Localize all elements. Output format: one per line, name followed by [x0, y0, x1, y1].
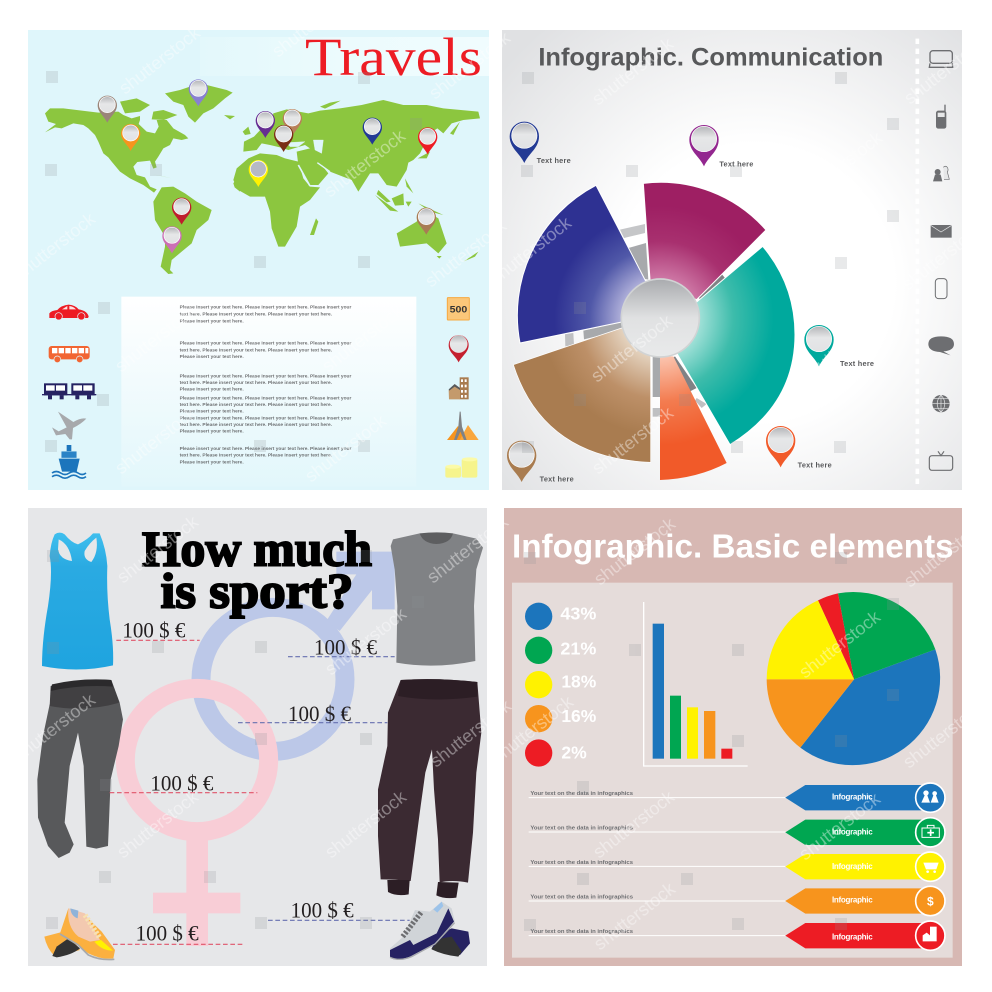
garment: tank top [42, 533, 113, 670]
arrow row green [785, 818, 945, 847]
icon: bus [49, 346, 90, 363]
paragraph text: Please insert your text here. Please insert your text here. Please insert your [180, 395, 351, 401]
garment: sleeveless shirt [391, 532, 483, 666]
watermark text: shutterstock [321, 786, 411, 862]
watermark text: shutterstock [113, 786, 203, 862]
arrow row orange: $ [927, 894, 934, 908]
arrow row blue: Infographic [832, 792, 873, 801]
icon: car [49, 305, 89, 320]
icon: globe [932, 395, 950, 412]
paragraph text: Please insert your text here. [180, 459, 244, 465]
row captions: Your text on the data in infographics [530, 895, 633, 901]
callout labels: Text here [540, 475, 574, 484]
callout labels: Text here [537, 156, 571, 165]
pin brown [417, 208, 436, 235]
icon: phone [936, 105, 946, 129]
icon: coins [445, 457, 477, 478]
arrow row red [785, 921, 945, 950]
paragraph text: text here. Please insert your text here. Please insert your text here. [180, 380, 333, 386]
paragraph text: Please insert your text here. Please insert your text here. Please insert your [180, 305, 351, 311]
center disc [621, 279, 699, 357]
arrow row blue [785, 783, 945, 812]
watermark text: shutterstock [320, 125, 410, 201]
paragraph text: Please insert your text here. Please insert your text here. Please insert your [180, 340, 351, 346]
watermark text: shutterstock [423, 511, 513, 587]
pin orange [121, 124, 140, 151]
title band [200, 37, 489, 76]
icon: ship [52, 445, 86, 478]
watermark text: shutterstock [111, 300, 201, 376]
price lines and labels: 100 $ € [150, 770, 213, 795]
paragraph text: Please insert your text here. [180, 409, 244, 415]
sidebar icons [928, 51, 954, 470]
callout pin purple [689, 125, 719, 166]
icon: 500 sign [447, 298, 469, 320]
pin red [418, 127, 437, 154]
inner panel [512, 583, 953, 958]
icon: tv [929, 451, 953, 470]
watermark text: shutterstock [797, 310, 887, 386]
shoe: navy [390, 902, 470, 960]
paragraph text: text here. Please insert your text here. Please insert your text here. [180, 402, 333, 408]
sector brown [513, 328, 651, 462]
icon: train [42, 383, 96, 399]
white text panel [121, 297, 416, 487]
callout pin brown [507, 441, 536, 482]
watermark text: shutterstock [488, 691, 578, 767]
female symbol [125, 688, 269, 946]
garment: sweatpants [378, 679, 481, 898]
price lines and labels: 100 $ € [291, 898, 354, 923]
watermark text: shutterstock [900, 515, 990, 591]
sector navy [517, 185, 647, 343]
bar chart [644, 602, 748, 766]
panel background travels [28, 30, 489, 490]
icon: laptop [929, 51, 953, 67]
panel: travels [28, 27, 489, 490]
panel background sport [28, 508, 487, 966]
legend: 2% [561, 743, 587, 763]
watermark text: shutterstock [589, 786, 679, 862]
panel background basic [504, 508, 962, 966]
watermark squares [45, 71, 899, 931]
lower section travels [42, 297, 479, 487]
title: Infographic Communication: Infographic. Communication [538, 43, 883, 71]
sector orange [660, 356, 727, 480]
watermark text: shutterstock [321, 603, 411, 679]
arrow row green: Infographic [832, 827, 873, 836]
icon: 500 sign: 500 [450, 305, 467, 315]
icon: pin [449, 335, 469, 362]
watermark text: shutterstock [115, 22, 205, 98]
callout pin navy [510, 122, 539, 163]
title: How much is sport: is sport? [161, 563, 353, 619]
pin dark brown [274, 125, 293, 152]
panel: sport [28, 508, 487, 966]
arrow row orange: Infographic [832, 896, 873, 905]
legend: 43% [560, 604, 596, 624]
arrow row red: Infographic [832, 932, 873, 941]
icon: landmarks [447, 412, 479, 440]
watermark text: shutterstock [111, 402, 201, 478]
pin periwinkle [189, 79, 208, 106]
watermark text: shutterstock [797, 127, 887, 203]
icon: speech bubble [928, 336, 954, 355]
map landmasses [45, 85, 480, 274]
inland seas [287, 140, 330, 186]
callout labels [537, 156, 874, 484]
paragraph text: text here. Please insert your text here. Please insert your text here. [180, 312, 333, 318]
watermark text: shutterstock [590, 878, 680, 954]
price lines and labels [110, 618, 410, 945]
paragraph text: Please insert your text here. [180, 318, 244, 324]
watermark text: shutterstock [318, 300, 408, 376]
pin crimson [172, 198, 191, 225]
map pins [98, 79, 437, 253]
watermark text: shutterstock [426, 695, 516, 771]
row captions: Your text on the data in infographics [530, 860, 633, 866]
legend: 18% [561, 672, 596, 692]
panel: communication [502, 30, 962, 490]
title: Travels: Travels [305, 27, 482, 87]
garment: capri leggings [37, 679, 123, 858]
watermark text: shutterstock [10, 689, 100, 765]
watermark text: shutterstock [588, 402, 678, 478]
watermark text: shutterstock [900, 32, 990, 108]
watermark text: shutterstock [425, 27, 515, 103]
title: How much is sport [142, 520, 372, 619]
paragraph text: text here. Please insert your text here. Please insert your text here. [180, 453, 333, 459]
watermark text: shutterstock [10, 208, 100, 284]
paragraph text [180, 305, 351, 465]
row captions: Your text on the data in infographics [530, 791, 633, 797]
pie chart [767, 592, 940, 765]
arrow row orange [785, 886, 945, 916]
pin yellow [249, 160, 268, 187]
icon: plane [52, 412, 86, 439]
row captions: Your text on the data in infographics [530, 929, 633, 935]
sector teal [677, 246, 795, 445]
title: How much is sport: How much [142, 520, 372, 576]
legend: 16% [561, 706, 596, 726]
watermark text: shutterstock [421, 215, 511, 291]
watermark text: shutterstock [795, 606, 885, 682]
title: Basic elements: Infographic. Basic elements [512, 529, 954, 566]
paragraph text: Please insert your text here. Please insert your text here. Please insert your [180, 373, 351, 379]
callout labels: Text here [840, 359, 874, 368]
watermark text: shutterstock [590, 513, 680, 589]
callout labels: Text here [798, 460, 832, 469]
pin pink [162, 226, 182, 253]
watermark text: shutterstock [301, 410, 391, 486]
price lines and labels: 100 $ € [314, 634, 377, 659]
watermark text: shutterstock [588, 33, 678, 109]
paragraph text: Please insert your text here. Please insert your text here. Please insert your [180, 415, 351, 421]
watermark text: shutterstock [587, 310, 677, 386]
legend: 21% [560, 638, 596, 658]
paragraph text: text here. Please insert your text here. Please insert your text here. [180, 422, 333, 428]
callout labels: Text here [719, 159, 753, 168]
paragraph text: Please insert your text here. [180, 354, 244, 360]
paragraph text: Please insert your text here. Please insert your text here. Please insert your [180, 446, 351, 452]
wheel chart [513, 182, 795, 480]
sector magenta [643, 182, 766, 300]
icon: people [933, 166, 949, 181]
icon: buildings [449, 377, 469, 399]
price lines and labels: 100 $ € [136, 920, 199, 945]
paragraph text: Please insert your text here. [180, 387, 244, 393]
grey stubs [565, 224, 725, 417]
shoe: orange [44, 908, 115, 960]
row captions [530, 791, 633, 935]
panel: basic elements [504, 508, 962, 966]
price lines and labels: 100 $ € [122, 618, 185, 643]
watermark text: shutterstock [113, 511, 203, 587]
male symbol [201, 552, 395, 751]
arrow row yellow: Infographic [832, 862, 873, 871]
callout pin teal [804, 325, 834, 366]
pin taupe [98, 96, 117, 123]
price lines and labels: 100 $ € [288, 701, 351, 726]
watermark text: shutterstock [486, 212, 576, 288]
panel background communication [502, 30, 962, 490]
row captions: Your text on the data in infographics [530, 826, 633, 832]
watermark text: shutterstock [795, 788, 885, 864]
icon: tablet [935, 279, 947, 299]
pin navy [363, 118, 382, 145]
pin tan [283, 109, 302, 136]
watermark text: shutterstock [899, 696, 989, 772]
callout pin orange [766, 426, 795, 467]
paragraph text: text here. Please insert your text here. Please insert your text here. [180, 347, 333, 353]
legend [525, 603, 596, 767]
icon: envelope [931, 225, 952, 238]
pin purple [256, 111, 275, 138]
arrow row yellow [785, 852, 945, 881]
watermark text: shutterstock [898, 218, 988, 294]
paragraph text: Please insert your text here. [180, 429, 244, 435]
